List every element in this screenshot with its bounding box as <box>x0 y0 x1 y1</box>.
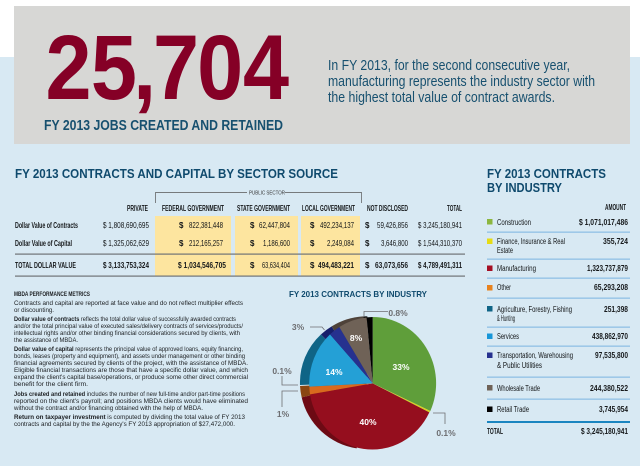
row: dollar value of contracts <box>15 221 462 230</box>
panel: headline banner <box>14 6 630 144</box>
big number caption: FY 2013 JOBS CREATED AND RETAINED <box>44 118 283 134</box>
row: retail trade: Retail Trade <box>497 405 529 414</box>
row: agriculture: Agriculture, Forestry, Fishing <box>497 305 572 314</box>
row: services: Services <box>497 332 519 341</box>
outside labels and leader lines: 0.1% <box>436 428 456 438</box>
heading: pie chart title: FY 2013 CONTRACTS BY INDUSTRY <box>289 289 427 299</box>
amount column header: AMOUNT <box>605 203 626 212</box>
outside labels and leader lines: 3% <box>292 322 305 332</box>
column headers: STATE GOVERNMENT <box>237 204 290 213</box>
row: total dollar value: $ <box>365 261 370 270</box>
row: dollar value of capital: $ <box>365 239 370 248</box>
row: dollar value of contracts: $ 3,245,180,941 <box>418 221 462 230</box>
row: dollar value of contracts: $ <box>365 221 370 230</box>
text block: MBDA performance metrics: reported on the client's payroll; and positions MBDA clients would have eliminated <box>14 398 249 405</box>
text block: MBDA performance metrics: or discounting. <box>14 307 54 314</box>
row: total: TOTAL <box>487 427 503 436</box>
big number: 25,704 <box>46 16 289 119</box>
text block: MBDA performance metrics: Contracts and capital are reported at face value and do not reflect multiplier effects <box>14 300 243 307</box>
row: dollar value of capital: $ 1,325,062,629 <box>103 239 149 248</box>
text block: MBDA performance metrics: Jobs created and retained includes the number of new full-time and/or part-time positions <box>14 391 245 398</box>
row: wholesale trade: 244,380,522 <box>590 384 628 393</box>
row: construction <box>487 218 628 227</box>
intro statement: In FY 2013, for the second consecutive year, <box>328 57 570 74</box>
row: total dollar value: $ 1,034,546,705 <box>178 261 226 270</box>
text block: MBDA performance metrics <box>13 291 249 428</box>
row: total dollar value: $ 4,789,491,311 <box>418 261 462 270</box>
column headers <box>127 204 462 213</box>
row: dollar value of contracts: $ 1,808,690,695 <box>103 221 149 230</box>
row: agriculture <box>487 305 628 323</box>
row: transportation: Transportation, Warehousing <box>497 351 573 360</box>
row: dollar value of capital: 1,186,600 <box>263 239 290 248</box>
intro statement: the highest total value of contract awards. <box>328 89 555 106</box>
text block: MBDA performance metrics: Eligible financial transactions are those that have a specific dollar value, and which <box>14 367 249 374</box>
row: finance: Finance, Insurance & Real <box>497 237 565 246</box>
column headers: NOT DISCLOSED <box>367 204 408 213</box>
panel: sector source table <box>15 190 465 277</box>
column headers: FEDERAL GOVERNMENT <box>162 204 224 213</box>
row: finance <box>487 237 628 255</box>
row: other: Other <box>497 283 511 292</box>
column headers: PRIVATE <box>127 204 148 213</box>
row: construction: Construction <box>497 218 531 227</box>
text block: MBDA performance metrics: expand the client's capital base/operations, or produce some other direct commercial <box>14 374 248 381</box>
row: dollar value of contracts: 62,447,804 <box>259 221 290 230</box>
text block: MBDA performance metrics: and/or the total principal value of executed sales/delivery contracts of services/products/ <box>14 323 243 330</box>
row: total <box>487 427 628 436</box>
row: wholesale trade: Wholesale Trade <box>497 384 540 393</box>
row: total dollar value: 494,483,221 <box>318 261 354 270</box>
column headers: LOCAL GOVERNMENT <box>302 204 355 213</box>
row: total dollar value <box>15 261 462 270</box>
text block: MBDA performance metrics: without the contract and/or financing obtained with the help of MBDA. <box>13 405 203 412</box>
row: total: $ 3,245,180,941 <box>581 427 628 436</box>
public sector bracket label: PUBLIC SECTOR <box>249 190 285 196</box>
row: construction: $ 1,071,017,486 <box>579 218 628 227</box>
row: agriculture: 251,398 <box>604 305 628 314</box>
row: manufacturing: 1,323,737,879 <box>587 264 628 273</box>
row: other: 65,293,208 <box>594 283 628 292</box>
row: finance: Estate <box>497 246 513 255</box>
row: dollar value of contracts: Dollar Value of Contracts <box>15 221 78 230</box>
heading: contracts by industry: BY INDUSTRY <box>487 180 562 195</box>
heading: contracts by industry <box>487 166 606 195</box>
row: total dollar value: 63,634,404 <box>262 261 290 270</box>
heading: contracts and capital by sector source: FY 2013 CONTRACTS AND CAPITAL BY SECTOR SOURCE <box>15 166 338 181</box>
row: services <box>487 332 628 341</box>
row: retail trade: 3,745,954 <box>599 405 628 414</box>
slice labels: 40% <box>359 417 377 427</box>
text block: MBDA performance metrics: contracts and capital by the the Agency's FY 2013 appropriation of $27,472,000. <box>14 421 235 428</box>
row: other <box>487 283 628 292</box>
row: services: 438,862,970 <box>592 332 628 341</box>
row: dollar value of contracts: 59,426,856 <box>377 221 408 230</box>
row: agriculture: & Hunting <box>497 314 515 323</box>
row: transportation <box>487 351 628 370</box>
column headers: TOTAL <box>447 204 462 213</box>
row: dollar value of contracts: $ <box>310 221 315 230</box>
row: dollar value of capital: $ 1,544,310,370 <box>418 239 462 248</box>
outside labels and leader lines <box>272 308 456 438</box>
row: dollar value of contracts: 492,234,137 <box>320 221 354 230</box>
outside labels and leader lines: 0.8% <box>388 308 408 318</box>
pie chart: contracts by industry <box>272 308 456 450</box>
heading: contracts by industry: FY 2013 CONTRACTS <box>487 166 606 181</box>
row: retail trade <box>487 405 628 414</box>
slice labels: 14% <box>325 367 343 377</box>
text block: MBDA performance metrics: benefit for the client firm. <box>14 381 88 388</box>
row: total dollar value: 63,073,656 <box>375 261 408 270</box>
slice labels: 8% <box>350 333 363 343</box>
row: total dollar value: $ 3,133,753,324 <box>103 261 149 270</box>
outside labels and leader lines: 0.1% <box>272 366 292 376</box>
row: dollar value of capital: 3,646,800 <box>381 239 408 248</box>
text block: MBDA performance metrics: Dollar value of capital represents the principal value of approved loans, equity financing, <box>14 346 243 353</box>
text block: MBDA performance metrics: Dollar value of contracts reflects the total dollar value of successfully awarded contracts <box>14 316 236 323</box>
row: dollar value of capital: $ <box>250 239 255 248</box>
slice labels <box>325 333 410 427</box>
row: finance: 355,724 <box>603 237 628 246</box>
row: dollar value of contracts: 822,381,448 <box>189 221 223 230</box>
text block: MBDA performance metrics: financial agreements secured by clients of the project, with the assistance of MBDA. <box>14 360 248 367</box>
row: dollar value of capital: 212,165,257 <box>189 239 223 248</box>
row: total dollar value: $ <box>250 261 255 270</box>
row: dollar value of capital: $ <box>179 239 184 248</box>
row: total dollar value: TOTAL DOLLAR VALUE <box>15 261 76 270</box>
row: dollar value of capital <box>15 239 462 248</box>
slice labels: 33% <box>392 362 410 372</box>
row: dollar value of contracts: $ <box>179 221 184 230</box>
row: transportation: 97,535,800 <box>595 351 628 360</box>
row: dollar value of capital: Dollar Value of Capital <box>15 239 72 248</box>
text block: MBDA performance metrics: intellectual rights and/or other binding financial considerations secured by clients, with <box>14 330 241 337</box>
text block: MBDA performance metrics: bonds, leases (property and equipment), and assets under management or other binding <box>14 353 246 360</box>
text block: MBDA performance metrics: the assistance of MBDA. <box>14 337 78 344</box>
row: wholesale trade <box>487 384 628 393</box>
row: transportation: & Public Utilities <box>497 361 542 370</box>
panel: industry amounts table <box>487 203 630 436</box>
row: total dollar value: $ <box>310 261 315 270</box>
row: dollar value of contracts: $ <box>250 221 255 230</box>
text block: MBDA performance metrics: Return on taxpayer investment is computed by dividing the total value of FY 2013 <box>14 414 246 421</box>
text block: MBDA performance metrics: MBDA PERFORMANCE METRICS <box>14 291 90 298</box>
row: dollar value of capital: $ <box>310 239 315 248</box>
row: manufacturing <box>487 264 628 273</box>
row: manufacturing: Manufacturing <box>497 264 536 273</box>
intro statement <box>328 57 595 106</box>
outside labels and leader lines: 1% <box>277 409 290 419</box>
row: dollar value of capital: 2,249,084 <box>327 239 354 248</box>
